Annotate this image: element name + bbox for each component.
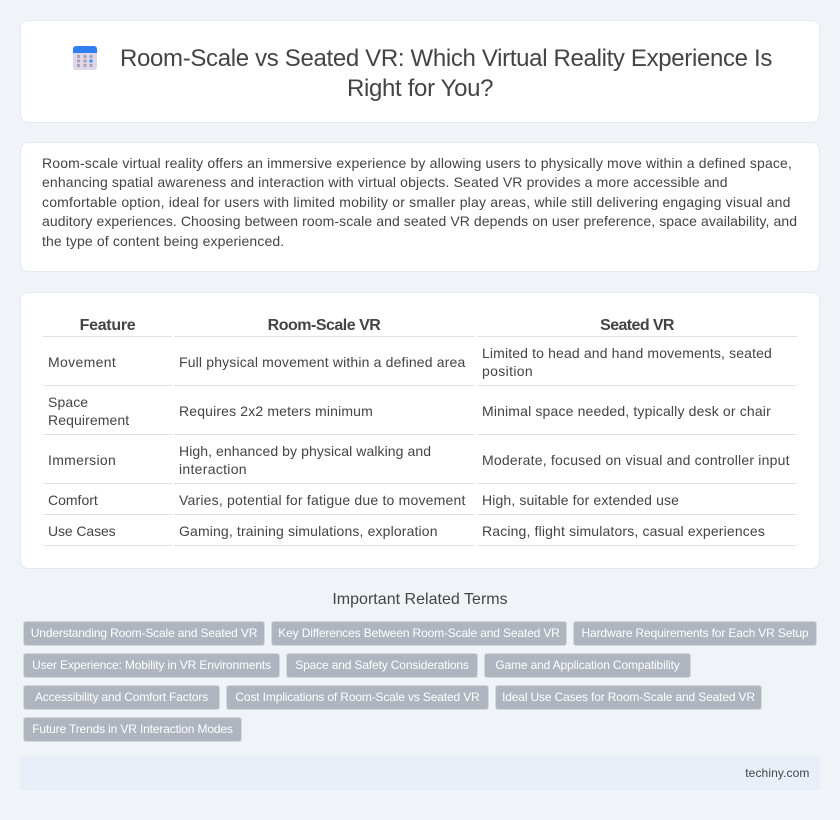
cell: Immersion room-scale: interaction: [179, 461, 247, 477]
tag: [495, 685, 762, 710]
tag: Hardware Requirements for Each VR Setup: [582, 626, 808, 640]
panel: introduction: [20, 142, 820, 272]
tag: Future Trends in VR Interaction Modes: [32, 722, 233, 736]
heading: related terms: Important Related Terms: [332, 590, 508, 608]
comparison table: [43, 317, 797, 546]
tag: [226, 685, 489, 710]
tag: [573, 621, 817, 646]
tag: [23, 653, 280, 678]
cell: Comfort seated: High, suitable for extended use: [482, 492, 679, 508]
tag: Cost Implications of Room-Scale vs Seated VR: [235, 690, 480, 704]
row: Immersion: Immersion: [48, 452, 116, 468]
tag: Game and Application Compatibility: [495, 658, 680, 672]
row: Space Requirement: Requirement: [48, 412, 129, 428]
row: Space Requirement: Space: [48, 394, 88, 410]
text block: introduction: enhancing spatial awareness and interaction with virtual objects. Seated VR provides a more accessible and: [42, 174, 728, 190]
tag: Understanding Room-Scale and Seated VR: [31, 626, 257, 640]
footer bar: [20, 756, 820, 790]
row: Movement: Movement: [48, 354, 116, 370]
cell: Space seated: Minimal space needed, typically desk or chair: [482, 403, 771, 419]
header: Feature: Feature: [80, 317, 135, 334]
text block: introduction: comfortable option, ideal for users with limited mobility or smaller play areas, while still delivering engaging visual and: [42, 194, 791, 210]
text block: introduction: Room-scale virtual reality offers an immersive experience by allowing users to physically move within a defined space,: [42, 154, 792, 170]
panel: comparison table: [20, 292, 820, 569]
tag: [271, 621, 567, 646]
cell: Immersion room-scale: [179, 443, 431, 477]
row: Space Requirement: [48, 394, 130, 428]
cell: Use Cases seated: Racing, flight simulators, casual experiences: [482, 523, 765, 539]
footer: site credit: techiny.com: [745, 766, 810, 780]
tag: Space and Safety Considerations: [295, 658, 469, 672]
header: Room-Scale VR: Room-Scale VR: [268, 317, 380, 334]
panel: title card: [20, 20, 820, 123]
tag: Key Differences Between Room-Scale and Seated VR: [278, 626, 560, 640]
tag: User Experience: Mobility in VR Environments: [32, 658, 271, 672]
cell: Movement seated: [482, 345, 772, 379]
cell: Space room-scale: Requires 2x2 meters minimum: [179, 403, 373, 419]
title: [120, 45, 772, 102]
cell: Comfort room-scale: Varies, potential for fatigue due to movement: [179, 492, 466, 508]
cell: Movement seated: position: [482, 363, 533, 379]
tag: [484, 653, 691, 678]
tag list: related terms: [23, 621, 817, 742]
tag: [23, 717, 242, 742]
cell: Movement seated: Limited to head and hand movements, seated: [482, 345, 772, 361]
text block: introduction: auditory experiences. Choosing between room-scale and seated VR depends on user preference, space availability, and: [42, 213, 797, 229]
cell: Immersion seated: Moderate, focused on visual and controller input: [482, 452, 790, 468]
cell: Movement room-scale: Full physical movement within a defined area: [179, 354, 465, 370]
tag: [23, 621, 265, 646]
tag: [286, 653, 478, 678]
text block: introduction: the type of content being experienced.: [42, 233, 284, 249]
row: Comfort: Comfort: [48, 492, 98, 508]
tag: [23, 685, 220, 710]
title: Room-Scale vs Seated VR: Which Virtual Reality Experience Is: [120, 45, 772, 72]
tag: Accessibility and Comfort Factors: [35, 690, 208, 704]
cell: Immersion room-scale: High, enhanced by physical walking and: [179, 443, 431, 459]
row: Use Cases: Use Cases: [48, 523, 116, 539]
title: Right for You?: [347, 75, 493, 102]
cell: Use Cases room-scale: Gaming, training simulations, exploration: [179, 523, 438, 539]
text block: introduction: [42, 154, 797, 249]
tag: Ideal Use Cases for Room-Scale and Seated VR: [502, 690, 755, 704]
icon: calendar grid: [73, 46, 97, 70]
header: Seated VR: Seated VR: [600, 317, 674, 334]
